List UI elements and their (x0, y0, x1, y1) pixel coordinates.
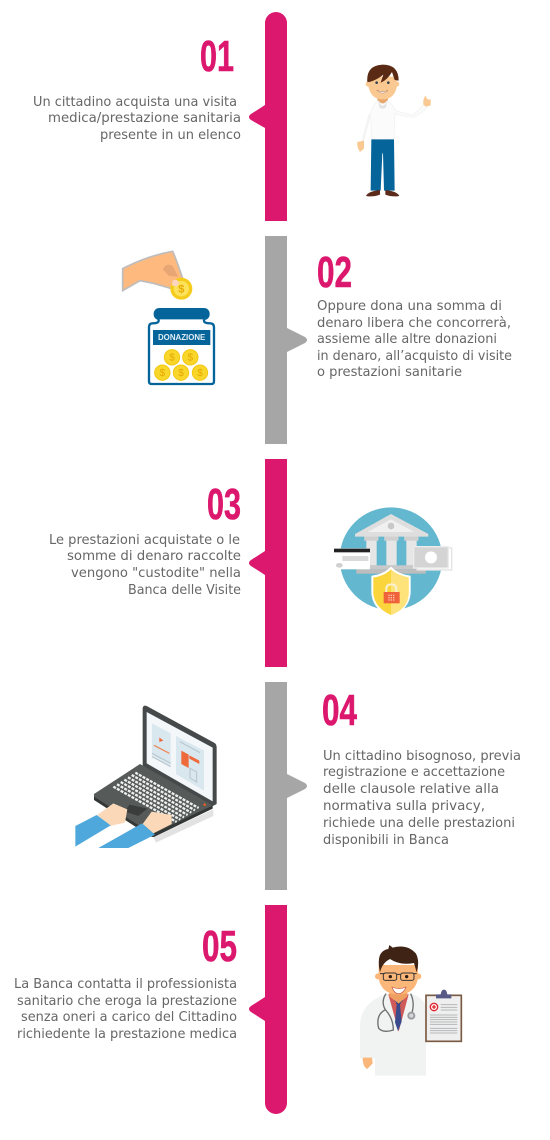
step 03 text: somme di denaro raccolte (67, 548, 241, 564)
step 05 text (14, 976, 237, 1042)
step 01 text: medica/prestazione sanitaria (48, 110, 241, 126)
step 02 text: denaro libera che concorrerà, (317, 315, 511, 331)
timeline segment 1 (249, 12, 287, 221)
icon: hand dropping coin into donation jar: $ (178, 284, 185, 296)
icon: hand dropping coin into donation jar: DONAZIONE (158, 333, 206, 342)
step 02 text: in denaro, all’acquisto di visite (317, 348, 512, 364)
step 01 number: 01 (200, 32, 234, 81)
icon: hand dropping coin into donation jar (123, 251, 214, 384)
step 03 text (49, 532, 241, 598)
step 02 text: Oppure dona una somma di (317, 298, 502, 314)
icon: doctor with clipboard (360, 945, 461, 1076)
step 04 text: registrazione e accettazione (323, 764, 505, 780)
step 01 text: presente in un elenco (100, 127, 241, 143)
icon: bank with shield, card and banknote (334, 507, 452, 616)
step 02 text: o prestazioni sanitarie (317, 364, 462, 380)
step 04 text (323, 748, 521, 848)
step 04 text: disponibili in Banca (323, 832, 449, 848)
timeline segment 3 (249, 459, 287, 667)
timeline segment 4 (265, 682, 307, 890)
timeline segment 5 (249, 905, 287, 1114)
step 05 number: 05 (202, 922, 237, 971)
step 05 text: richiedente la prestazione medica (17, 1026, 237, 1042)
step 04 number: 04 (322, 686, 357, 735)
step 04 text: Un cittadino bisognoso, previa (323, 748, 521, 764)
step 02 text: assieme alle altre donazioni (317, 331, 497, 347)
icon: hand dropping coin into donation jar: $ (178, 368, 184, 379)
step 04 text: normativa sulla privacy, (323, 798, 485, 814)
icon: hand dropping coin into donation jar: $ (169, 353, 175, 364)
step 04 text: richiede una delle prestazioni (323, 815, 515, 831)
step 01 text: Un cittadino acquista una visita (33, 94, 237, 110)
step 05 text: sanitario che eroga la prestazione (17, 993, 237, 1009)
step 03 text: Le prestazioni acquistate o le (49, 532, 240, 548)
icon: hand dropping coin into donation jar: $ (188, 353, 194, 364)
step 05 text: senza oneri a carico del Cittadino (21, 1009, 237, 1025)
step 03 text: vengono "custodite" nella (71, 565, 241, 581)
step 04 text: delle clausole relative alla (323, 781, 499, 797)
step 03 text: Banca delle Visite (128, 582, 241, 598)
step 02 number: 02 (317, 248, 352, 297)
step 02 text (317, 298, 512, 380)
step 05 text: La Banca contatta il professionista (14, 976, 237, 992)
step 01 text (33, 94, 241, 143)
icon: man with thumbs up (357, 65, 431, 196)
icon: laptop with hands typing (75, 706, 217, 848)
step 03 number: 03 (207, 480, 241, 529)
icon: hand dropping coin into donation jar: $ (197, 368, 203, 379)
icon: hand dropping coin into donation jar: $ (160, 368, 166, 379)
timeline segment 2 (265, 236, 307, 444)
